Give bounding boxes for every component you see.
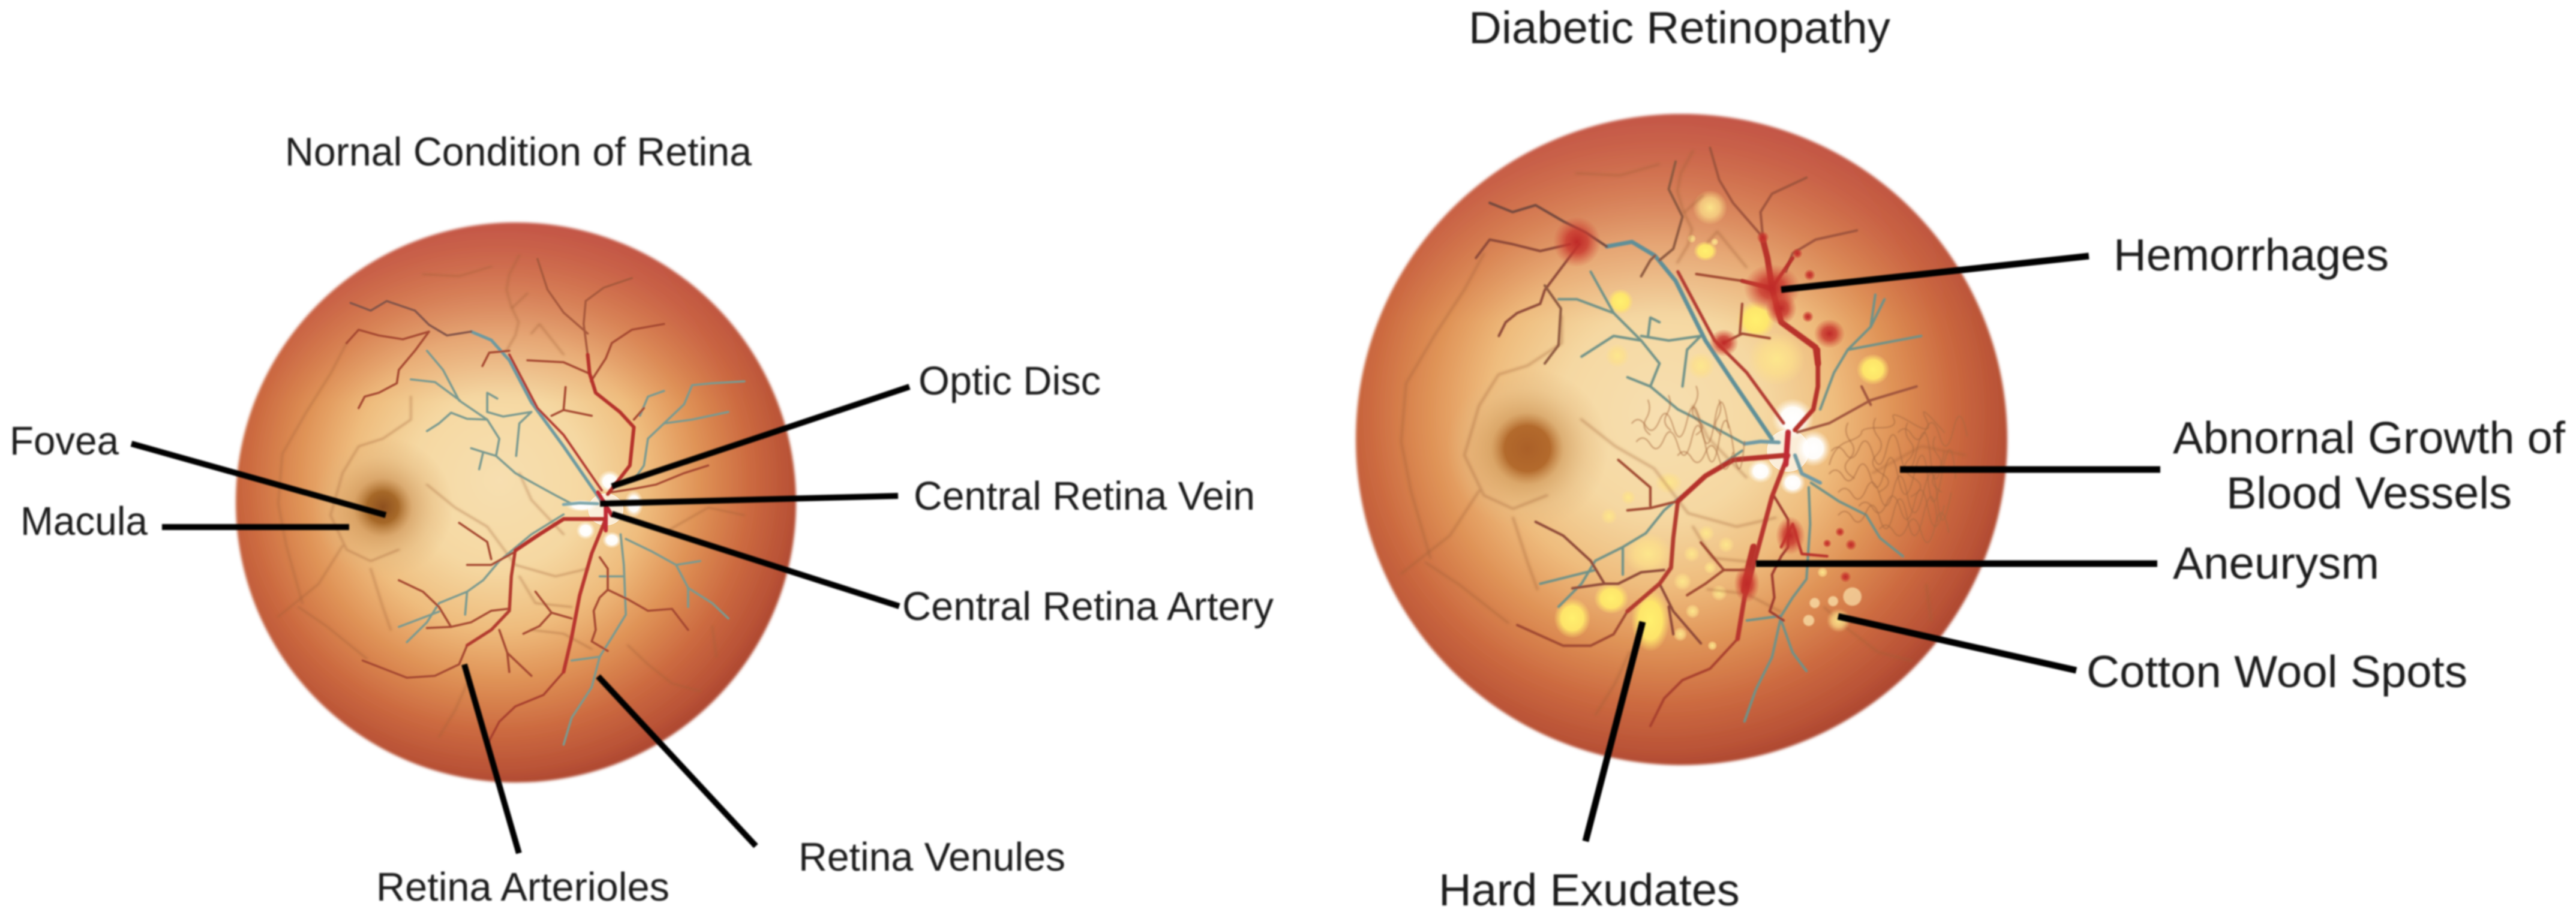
label: abnormal growth of blood vessels: Blood Vessels <box>2226 468 2512 518</box>
label: hard exudates: Hard Exudates <box>1439 865 1740 915</box>
label: macula: Macula <box>20 499 148 544</box>
title: diabetic retinopathy: Diabetic Retinopathy <box>1469 2 1890 53</box>
hemorrhages <box>1553 216 1857 603</box>
label: abnormal growth of blood vessels <box>2173 413 2565 518</box>
labels: diabetic retinopathy <box>1439 2 2565 915</box>
panel: diabetic retinopathy eye <box>1356 114 2007 765</box>
retinal vessels: diabetic <box>1476 148 1922 726</box>
optic disc glow: diabetic <box>1748 398 1831 495</box>
macula and fovea: diabetic <box>1446 368 1608 529</box>
label: optic disc: Optic Disc <box>918 359 1101 404</box>
leader lines: normal retina <box>131 387 909 853</box>
cotton wool spots <box>1803 588 1862 633</box>
retinal vessels: normal <box>347 259 744 745</box>
label: retina venules: Retina Venules <box>798 835 1065 880</box>
faint background capillaries: normal <box>278 255 744 737</box>
label: hemorrhages: Hemorrhages <box>2113 230 2389 280</box>
fundus disc: diabetic <box>1356 114 2007 765</box>
label: aneurysm: Aneurysm <box>2173 538 2379 588</box>
title: normal condition: Nornal Condition of Retina <box>285 130 752 174</box>
fundus disc: normal <box>236 222 796 782</box>
label: central retina vein: Central Retina Vein <box>914 474 1255 519</box>
hard exudates <box>1554 190 1890 652</box>
labels: normal retina <box>10 130 1274 910</box>
panel: normal retina eye <box>236 222 796 782</box>
label: central retina artery: Central Retina Artery <box>902 584 1274 629</box>
abnormal growth of blood vessels <box>1632 386 1967 543</box>
faint background capillaries: diabetic <box>1401 151 1965 715</box>
label: retina arterioles: Retina Arterioles <box>376 865 669 910</box>
leader lines: diabetic retinopathy <box>1586 256 2160 841</box>
label: cotton wool spots: Cotton Wool Spots <box>2086 646 2467 697</box>
optic disc glow: normal <box>566 470 644 549</box>
macula and fovea: normal <box>312 437 454 578</box>
label: fovea: Fovea <box>10 419 119 463</box>
thickened leaking arteries <box>1742 240 1827 591</box>
label: abnormal growth of blood vessels: Abnornal Growth of <box>2173 413 2565 463</box>
